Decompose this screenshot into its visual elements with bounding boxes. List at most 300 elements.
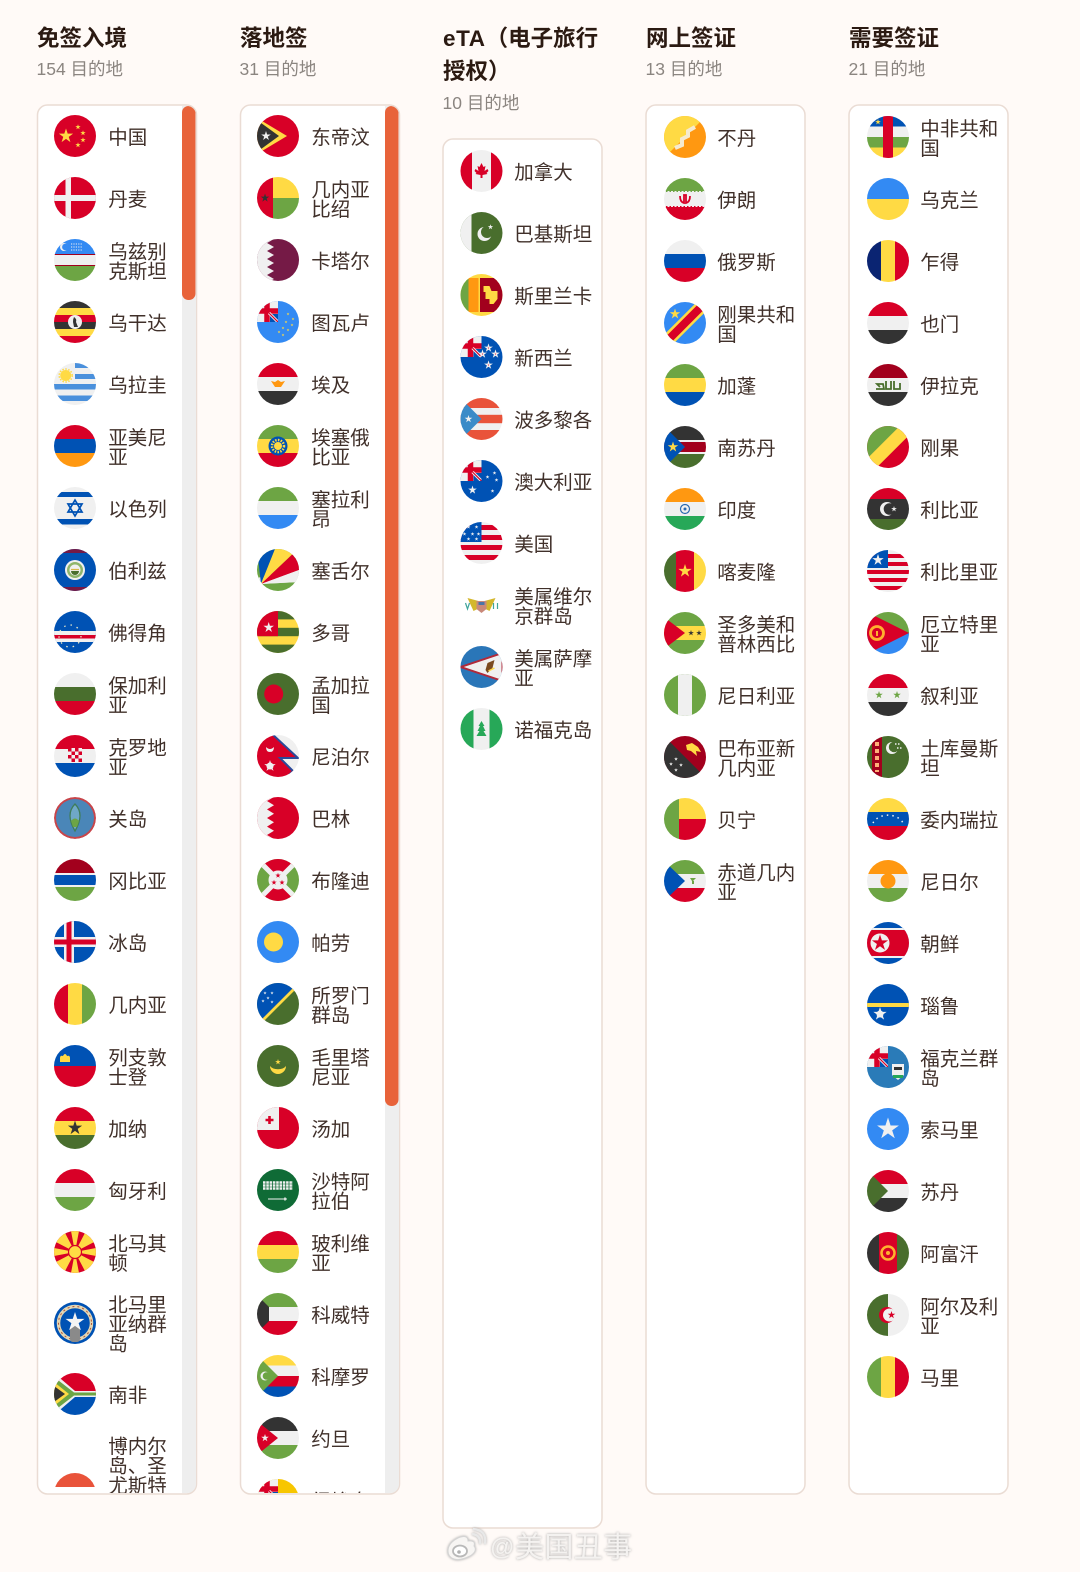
scrollbar bbox=[385, 105, 399, 1494]
label: 乌干达 bbox=[108, 313, 167, 335]
flag: Mali bbox=[867, 1356, 909, 1398]
row: 土库曼斯坦 bbox=[867, 736, 998, 780]
flag: Gabon bbox=[664, 364, 706, 406]
label: 克斯坦 bbox=[108, 261, 167, 283]
flag: Bulgaria bbox=[54, 673, 96, 715]
label: 尼日利亚 bbox=[717, 686, 795, 708]
row: 澳大利亚 bbox=[460, 460, 592, 502]
label: 沙特阿 bbox=[311, 1172, 370, 1194]
label: 多哥 bbox=[311, 623, 350, 645]
label: 北马其 bbox=[108, 1234, 167, 1256]
row: 塞拉利昂 bbox=[257, 487, 370, 531]
row: 尼日利亚 bbox=[664, 674, 795, 716]
flag: Bolivia bbox=[257, 1231, 299, 1273]
row: 波多黎各 bbox=[460, 398, 592, 440]
row: 中国 bbox=[54, 115, 147, 157]
flag: Mauritania bbox=[257, 1045, 299, 1087]
label: 乍得 bbox=[920, 252, 959, 274]
label: 尼泊尔 bbox=[311, 747, 370, 769]
row: 诺福克岛 bbox=[460, 708, 592, 750]
label: 以色列 bbox=[108, 499, 167, 521]
flag: Qatar bbox=[257, 239, 299, 281]
row: 博内尔岛、圣尤斯特 (clipped) bbox=[54, 1436, 167, 1497]
row: 乌干达 bbox=[54, 301, 167, 343]
flag: Liberia bbox=[867, 550, 909, 592]
row: 孟加拉国 bbox=[257, 673, 370, 717]
label: 伯利兹 bbox=[108, 561, 167, 583]
label: 刚果共和 bbox=[717, 304, 795, 326]
row: 喀麦隆 bbox=[664, 550, 776, 592]
label: 叙利亚 bbox=[920, 686, 979, 708]
row: 加纳 bbox=[54, 1107, 147, 1149]
flag: Bhutan bbox=[664, 116, 706, 158]
row: 佛得角 bbox=[54, 611, 167, 653]
flag: Uzbekistan bbox=[54, 239, 96, 281]
flag: Kuwait bbox=[257, 1293, 299, 1335]
row: 埃塞俄比亚 bbox=[257, 425, 370, 469]
row: 索马里 bbox=[867, 1108, 979, 1150]
label: 中非共和 bbox=[920, 118, 998, 140]
label: 匈牙利 bbox=[108, 1181, 167, 1203]
flag: Ukraine bbox=[867, 178, 909, 220]
flag: Libya bbox=[867, 488, 909, 530]
flag: Papua New Guinea bbox=[664, 736, 706, 778]
label: 坦 bbox=[920, 758, 940, 780]
row: 巴基斯坦 bbox=[460, 212, 592, 254]
label: 顿 bbox=[108, 1253, 128, 1275]
row: 利比亚 bbox=[867, 488, 979, 530]
flag: Sierra Leone bbox=[257, 487, 299, 529]
column: 网上签证 bbox=[646, 26, 805, 1494]
flag: Bahrain bbox=[257, 797, 299, 839]
flag: Bangladesh bbox=[257, 673, 299, 715]
flag: Yemen bbox=[867, 302, 909, 344]
row: 玻利维亚 bbox=[257, 1231, 370, 1275]
label: 佛得角 bbox=[108, 623, 167, 645]
row: 南非 bbox=[54, 1373, 147, 1415]
label: 图瓦卢 bbox=[311, 313, 370, 335]
label: 关岛 bbox=[108, 809, 147, 831]
flag: Guam bbox=[54, 797, 96, 839]
label: 比绍 bbox=[311, 199, 350, 221]
label: 帕劳 bbox=[311, 933, 350, 955]
subheading: 154 目的地: 154 目的地 bbox=[36, 59, 123, 79]
label: 乌拉圭 bbox=[108, 375, 167, 397]
label: 岛、圣 bbox=[108, 1456, 167, 1478]
row: 东帝汶 bbox=[257, 115, 370, 157]
label: 几内亚 bbox=[717, 758, 776, 780]
row: 圣多美和普林西比 bbox=[664, 612, 795, 656]
label: 乌克兰 bbox=[920, 190, 979, 212]
heading: 网上签证: 网上签证 bbox=[646, 26, 736, 51]
row: 几内亚 bbox=[54, 983, 167, 1025]
label: 中国 bbox=[108, 127, 147, 149]
heading: eTA（电子旅行授权）: eTA（电子旅行 bbox=[443, 26, 598, 51]
flag: Niger bbox=[867, 860, 909, 902]
label: 巴林 bbox=[311, 809, 350, 831]
row: 所罗门群岛 bbox=[257, 983, 370, 1027]
label: 毛里塔 bbox=[311, 1048, 370, 1070]
flag: Puerto Rico bbox=[460, 398, 502, 440]
label: 埃塞俄 bbox=[311, 428, 370, 450]
row: 厄立特里亚 bbox=[867, 612, 998, 656]
label: 孟加拉 bbox=[311, 676, 370, 698]
label: 澳大利亚 bbox=[514, 472, 592, 494]
label: 几内亚 bbox=[311, 180, 370, 202]
row: 美属维尔京群岛 bbox=[466, 586, 592, 628]
label: 亚 bbox=[108, 447, 128, 469]
row: 美属萨摩亚 bbox=[460, 646, 592, 690]
label: 京群岛 bbox=[514, 606, 573, 628]
flag: Northern Mariana Islands bbox=[54, 1302, 96, 1344]
label: 岛 bbox=[920, 1068, 940, 1090]
flag: Tuvalu bbox=[257, 301, 299, 343]
row: 尼泊尔 bbox=[255, 733, 370, 779]
label: 刚果 bbox=[920, 438, 959, 460]
row: 巴林 bbox=[257, 797, 350, 839]
label: 纽埃岛 bbox=[311, 1491, 370, 1513]
label: 新西兰 bbox=[514, 348, 573, 370]
label: 利比里亚 bbox=[920, 562, 998, 584]
flag: Hungary bbox=[54, 1169, 96, 1211]
label: 南非 bbox=[108, 1385, 147, 1407]
flag: Afghanistan bbox=[867, 1232, 909, 1274]
row: 塞舌尔 bbox=[257, 549, 370, 591]
row: 约旦 bbox=[257, 1417, 350, 1459]
flag: Australia bbox=[460, 460, 502, 502]
label: 波多黎各 bbox=[514, 410, 592, 432]
label: 美属萨摩 bbox=[514, 648, 592, 670]
label: 诺福克岛 bbox=[514, 720, 592, 742]
label: 也门 bbox=[920, 314, 959, 336]
row: 叙利亚 bbox=[867, 674, 979, 716]
row: 加拿大 bbox=[460, 150, 573, 192]
row: 刚果共和国 bbox=[664, 302, 795, 346]
flag: Seychelles bbox=[257, 549, 299, 591]
flag: Venezuela bbox=[867, 798, 909, 840]
row: 北马其顿 bbox=[54, 1231, 167, 1275]
label: 布隆迪 bbox=[311, 871, 370, 893]
label: 丹麦 bbox=[108, 189, 147, 211]
label: 巴基斯坦 bbox=[514, 224, 592, 246]
label: 伊朗 bbox=[717, 190, 756, 212]
label: 阿富汗 bbox=[920, 1244, 979, 1266]
row: 刚果 bbox=[867, 426, 959, 468]
heading: eTA（电子旅行授权）: 授权） bbox=[443, 59, 511, 84]
flag: Nigeria bbox=[664, 674, 706, 716]
row: 南苏丹 bbox=[664, 426, 776, 468]
row: 纽埃岛 (clipped) bbox=[257, 1479, 370, 1521]
row: 伊朗 bbox=[664, 178, 756, 220]
row: 乍得 bbox=[867, 240, 959, 282]
flag: South Sudan bbox=[664, 426, 706, 468]
row: 克罗地亚 bbox=[54, 735, 167, 779]
row: 马里 bbox=[867, 1356, 959, 1398]
row: 图瓦卢 bbox=[257, 301, 370, 343]
label: 北马里 bbox=[108, 1294, 167, 1316]
row: 以色列 bbox=[54, 487, 167, 529]
label: 加拿大 bbox=[514, 161, 573, 184]
label: 塞拉利 bbox=[311, 490, 370, 512]
label: 南苏丹 bbox=[717, 438, 776, 460]
row: 几内亚比绍 bbox=[257, 177, 370, 221]
row: 贝宁 bbox=[664, 798, 756, 840]
row: 科摩罗 bbox=[257, 1355, 370, 1397]
flag: Sudan bbox=[867, 1170, 909, 1212]
label: 亚纳群 bbox=[108, 1314, 167, 1336]
flag: Burundi bbox=[257, 859, 299, 901]
label: 几内亚 bbox=[108, 995, 167, 1017]
label: 贝宁 bbox=[717, 810, 756, 832]
watermark text: @ bbox=[490, 1534, 514, 1561]
flag: Palau bbox=[257, 921, 299, 963]
label: 玻利维 bbox=[311, 1234, 370, 1256]
row: 尼日尔 bbox=[867, 860, 979, 902]
flag: Israel bbox=[54, 487, 96, 529]
label: 汤加 bbox=[311, 1119, 350, 1141]
label: 斯里兰卡 bbox=[514, 286, 592, 308]
row: 乌兹别克斯坦 bbox=[54, 239, 167, 283]
row: 赤道几内亚 bbox=[664, 860, 795, 904]
icon: weibo logo bbox=[448, 1529, 485, 1560]
row: 加蓬 bbox=[664, 364, 756, 406]
flag: Saudi Arabia bbox=[257, 1169, 299, 1211]
flag: Eritrea bbox=[867, 612, 909, 654]
flag: East Timor bbox=[257, 115, 299, 157]
row: 阿尔及利亚 bbox=[867, 1294, 998, 1338]
flag: American Samoa bbox=[460, 646, 502, 688]
label: 昂 bbox=[311, 509, 331, 531]
label: 伊拉克 bbox=[920, 376, 979, 398]
row: 俄罗斯 bbox=[664, 240, 776, 282]
label: 卡塔尔 bbox=[311, 251, 370, 273]
label: 尼亚 bbox=[311, 1067, 350, 1089]
flag: Norfolk Island bbox=[460, 708, 502, 750]
label: 冰岛 bbox=[108, 933, 147, 955]
flag: Croatia bbox=[54, 735, 96, 777]
panel: 落地签 list bbox=[240, 105, 400, 1521]
flag: Niue (clipped) bbox=[257, 1479, 299, 1521]
watermark text: 美国丑事 bbox=[515, 1531, 633, 1564]
flag: Central African Republic bbox=[867, 116, 909, 158]
flag: Canada bbox=[460, 150, 502, 192]
label: 士登 bbox=[108, 1067, 147, 1089]
flag: Solomon Islands bbox=[257, 983, 300, 1026]
flag: Nauru bbox=[867, 984, 909, 1026]
flag: Togo bbox=[257, 611, 299, 653]
label: 索马里 bbox=[920, 1120, 979, 1142]
heading: 落地签: 落地签 bbox=[240, 26, 308, 51]
row: 冈比亚 bbox=[54, 859, 167, 901]
label: 厄立特里 bbox=[920, 614, 998, 636]
row: 北马里亚纳群岛 bbox=[54, 1294, 167, 1356]
row: 不丹 bbox=[664, 116, 756, 158]
flag: Liechtenstein bbox=[54, 1045, 96, 1087]
flag: Nepal bbox=[255, 733, 299, 779]
flag: Falkland Islands bbox=[867, 1046, 909, 1088]
row: 布隆迪 bbox=[257, 859, 370, 901]
label: 比亚 bbox=[311, 447, 350, 469]
row: 巴布亚新几内亚 bbox=[664, 736, 795, 780]
label: 国 bbox=[717, 324, 737, 346]
column: eTA bbox=[442, 26, 602, 1528]
flag: Jordan bbox=[257, 1417, 299, 1459]
flag: Iran bbox=[664, 178, 706, 220]
flag: India bbox=[664, 488, 706, 530]
label: 赤道几内 bbox=[717, 862, 795, 884]
label: 加纳 bbox=[108, 1119, 147, 1141]
row: 卡塔尔 bbox=[257, 239, 370, 281]
label: 马里 bbox=[920, 1368, 959, 1390]
label: 苏丹 bbox=[920, 1182, 959, 1204]
flag: Uruguay bbox=[54, 363, 96, 405]
row: 乌克兰 bbox=[867, 178, 979, 220]
label: 所罗门 bbox=[311, 986, 370, 1008]
label: 印度 bbox=[717, 500, 756, 522]
flag: Tonga bbox=[257, 1107, 299, 1149]
label: 尤斯特 bbox=[108, 1475, 167, 1497]
flag: Somalia bbox=[867, 1108, 909, 1150]
row: 保加利亚 bbox=[54, 673, 167, 717]
row: 阿富汗 bbox=[867, 1232, 979, 1274]
label: 亚 bbox=[920, 1316, 940, 1338]
label: 约旦 bbox=[311, 1429, 350, 1451]
panel: 需要签证 list bbox=[849, 105, 1008, 1494]
label: 土库曼斯 bbox=[920, 738, 998, 760]
row: 科威特 bbox=[257, 1293, 370, 1335]
label: 福克兰群 bbox=[920, 1048, 998, 1070]
row: 委内瑞拉 bbox=[867, 798, 998, 840]
row: 乌拉圭 bbox=[54, 363, 167, 405]
flag: Chad bbox=[867, 240, 909, 282]
heading: 需要签证: 需要签证 bbox=[849, 26, 939, 51]
flag: Sao Tome and Principe bbox=[664, 612, 706, 654]
flag: Comoros bbox=[257, 1355, 299, 1397]
label: 加蓬 bbox=[717, 376, 756, 398]
flag: Ethiopia bbox=[257, 425, 299, 467]
row: 中非共和国 bbox=[867, 116, 998, 160]
label: 亚 bbox=[717, 882, 737, 904]
row: 关岛 bbox=[54, 797, 147, 839]
column: 落地签 bbox=[240, 26, 400, 1521]
label: 国 bbox=[311, 695, 331, 717]
row: 印度 bbox=[664, 488, 756, 530]
row: 埃及 bbox=[257, 363, 350, 405]
panel: 免签入境 list bbox=[38, 105, 196, 1497]
flag: Guinea-Bissau bbox=[257, 177, 299, 219]
flag: US Virgin Islands bbox=[466, 598, 498, 613]
label: 阿尔及利 bbox=[920, 1296, 998, 1318]
row: 汤加 bbox=[257, 1107, 350, 1149]
label: 亚 bbox=[311, 1253, 331, 1275]
flag: Denmark bbox=[54, 177, 96, 219]
flag: New Zealand bbox=[460, 336, 502, 378]
label: 乌兹别 bbox=[108, 242, 167, 264]
label: 普林西比 bbox=[717, 634, 795, 656]
label: 列支敦 bbox=[108, 1048, 167, 1070]
subheading: 13 目的地: 13 目的地 bbox=[646, 59, 722, 79]
column: 需要签证 bbox=[848, 26, 1008, 1494]
flag: Bonaire (clipped) bbox=[54, 1473, 96, 1487]
watermark: weibo bbox=[448, 1529, 633, 1564]
label: 塞舌尔 bbox=[311, 561, 370, 583]
label: 委内瑞拉 bbox=[920, 810, 998, 832]
flag: Equatorial Guinea bbox=[664, 860, 706, 902]
flag: North Macedonia bbox=[54, 1231, 96, 1273]
label: 亚 bbox=[920, 634, 940, 656]
heading: 免签入境: 免签入境 bbox=[37, 26, 127, 51]
label: 拉伯 bbox=[311, 1191, 350, 1213]
label: 圣多美和 bbox=[717, 614, 795, 636]
label: 保加利 bbox=[108, 676, 167, 698]
subheading: 10 目的地: 10 目的地 bbox=[442, 93, 519, 113]
flag: Cameroon bbox=[664, 550, 706, 592]
flag: Turkmenistan bbox=[867, 736, 909, 778]
scrollbar bbox=[182, 105, 196, 1494]
label: 科摩罗 bbox=[311, 1367, 370, 1389]
row: 丹麦 bbox=[54, 177, 147, 219]
row: 朝鲜 bbox=[867, 922, 959, 964]
label: 埃及 bbox=[311, 375, 350, 397]
label: 群岛 bbox=[311, 1005, 350, 1027]
flag: Ghana bbox=[54, 1107, 96, 1149]
label: 国 bbox=[920, 138, 940, 160]
flag: Syria bbox=[867, 674, 909, 716]
flag: Benin bbox=[664, 798, 706, 840]
flag: Congo bbox=[867, 426, 909, 468]
row: 列支敦士登 bbox=[54, 1045, 167, 1089]
row: 毛里塔尼亚 bbox=[257, 1045, 370, 1089]
row: 新西兰 bbox=[460, 336, 573, 378]
label: 不丹 bbox=[717, 128, 756, 150]
subheading: 31 目的地: 31 目的地 bbox=[240, 59, 316, 79]
flag: United States bbox=[460, 522, 502, 564]
flag: Uganda bbox=[54, 301, 96, 343]
flag: Armenia bbox=[54, 425, 96, 467]
row: 伯利兹 bbox=[54, 549, 167, 591]
row: 伊拉克 bbox=[867, 364, 979, 406]
row: 匈牙利 bbox=[54, 1169, 167, 1211]
flag: Iraq bbox=[867, 364, 909, 406]
label: 尼日尔 bbox=[920, 872, 979, 894]
flag: China bbox=[54, 115, 96, 157]
label: 美国 bbox=[514, 534, 553, 556]
label: 克罗地 bbox=[108, 738, 167, 760]
label: 美属维尔 bbox=[514, 586, 592, 608]
flag: Gambia bbox=[54, 859, 96, 901]
label: 瑙鲁 bbox=[920, 996, 959, 1018]
row: 美国 bbox=[460, 522, 553, 564]
label: 巴布亚新 bbox=[717, 738, 795, 760]
flag: Pakistan bbox=[460, 212, 502, 254]
subheading: 21 目的地: 21 目的地 bbox=[848, 59, 925, 79]
panel: 网上签证 list bbox=[646, 105, 805, 1494]
flag: Cape Verde bbox=[54, 611, 96, 653]
panel: eTA list bbox=[443, 139, 602, 1528]
label: 亚 bbox=[108, 757, 128, 779]
row: 也门 bbox=[867, 302, 959, 344]
label: 利比亚 bbox=[920, 500, 979, 522]
row: 冰岛 bbox=[54, 921, 147, 963]
label: 东帝汶 bbox=[311, 127, 370, 149]
row: 苏丹 bbox=[867, 1170, 959, 1212]
column: 免签入境 bbox=[36, 26, 196, 1497]
row: 多哥 bbox=[257, 611, 350, 653]
label: 博内尔 bbox=[108, 1436, 167, 1458]
label: 冈比亚 bbox=[108, 871, 167, 893]
row: 亚美尼亚 bbox=[54, 425, 167, 469]
row: 帕劳 bbox=[257, 921, 350, 963]
